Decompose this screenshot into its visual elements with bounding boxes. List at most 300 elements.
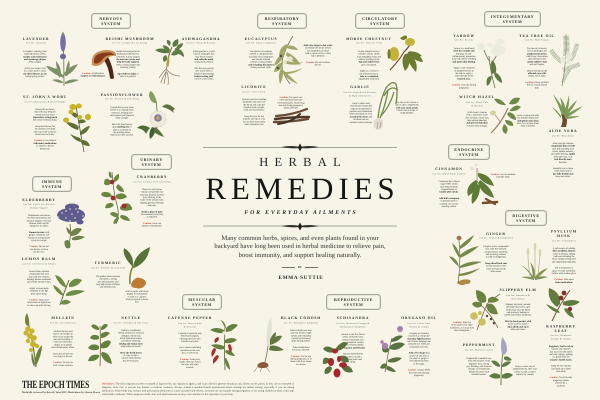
- text: yarrow: may help reduce swelling: [452, 57, 476, 60]
- byline: by: BY: [298, 266, 302, 269]
- text: st. john's wort: with many medications: [33, 142, 57, 144]
- subtitle: eucalyptus: Use for: Nasal Congestion: [246, 42, 276, 44]
- text: black cohosh: shifts during midlife. Take standardized: [291, 340, 311, 348]
- text: licorice: [242, 98, 266, 126]
- section label: circulatory system: [355, 13, 405, 29]
- text: raspberry leaf: pregnancy unless: [553, 378, 569, 381]
- heading: garlic: GARLIC: [350, 85, 370, 89]
- text: eucalyptus usage: for congestion or dilute: [307, 49, 329, 52]
- text: reishi mushroom: restoring vitality. Sip reishi tea daily or: [117, 66, 139, 74]
- text: cinnamon: oatmeal, tea or your: [440, 202, 458, 204]
- section label: respiratory system: RESPIRATORY: [265, 16, 299, 21]
- subtitle: nettle: Use for: Allergies & Hay Fever: [113, 321, 149, 324]
- subtitle: turmeric: Use for: Arthritis & Joint Pain: [91, 266, 125, 269]
- text: mullein: Mullein flowers and: [53, 330, 73, 332]
- text: eucalyptus usage: [303, 44, 333, 66]
- text: garlic caution: day or take a supplement: [395, 103, 419, 106]
- text: st. john's wort: this herb may help lift: [35, 111, 55, 113]
- text: oregano oil: first and avoid during: [409, 371, 429, 374]
- text: witch hazel: and prevent infection: [466, 121, 488, 124]
- text: lavender: and encourage deeper: [24, 58, 46, 60]
- icon: yarrow plant: [477, 39, 505, 88]
- text: witch hazel: help reduce bleeding: [467, 119, 487, 121]
- text: licorice caution: lower potassium. Avoid long: [278, 101, 304, 104]
- text: tea tree oil: skin infections and: [528, 57, 546, 60]
- text: slippery elm: thick drink and sip it: [507, 325, 529, 328]
- section label: muscular system: SYSTEM: [192, 302, 212, 307]
- text: oregano oil: Oregano oil contains: [409, 332, 429, 334]
- text: ginger: [483, 244, 509, 272]
- section label: nervous system: [91, 13, 131, 29]
- credit line: Medically reviewed by Beverly Yates MD | Illustrations by Sharon Moore: [22, 390, 100, 393]
- text: licorice: two or three times daily: [243, 120, 265, 123]
- text: horse chestnut: may strengthen veins and: [357, 55, 381, 57]
- text: horse chestnut: [357, 50, 381, 80]
- text: schisandra: in water to make a: [344, 355, 362, 357]
- text: passionflower: sleep at night. Brew the dried leaves: [112, 116, 132, 125]
- title: remedies: REMEDIES: [205, 171, 400, 206]
- icon: eucalyptus branch: [274, 36, 303, 84]
- text: psyllium husk: from medications.: [555, 280, 573, 283]
- text: schisandra: and hot flashes during: [343, 343, 363, 346]
- heading: peppermint: PEPPERMINT: [463, 343, 495, 347]
- text: cayenne pepper: reduce pain signals,: [181, 334, 199, 337]
- text: eucalyptus: [248, 50, 274, 68]
- text: cinnamon: of ground spice to: [441, 199, 457, 202]
- subtitle: elderberry: Use for: Colds, Flu & Fever: [23, 203, 55, 205]
- icon: black cohosh plant: [253, 316, 287, 374]
- text: turmeric usage: or take as a capsule.: [128, 295, 146, 298]
- text: tea tree oil: skin.: [535, 86, 539, 88]
- section label: muscular system: [182, 294, 222, 310]
- text: witch hazel usage: the distilled liquid and: [517, 116, 539, 119]
- text: passionflower: take as a tincture in: [113, 128, 131, 130]
- text: reishi caution: [80, 72, 106, 77]
- heading: horse chestnut: HORSE CHESTNUT: [346, 36, 392, 40]
- section label: reproductive system: REPRODUCTIVE: [334, 297, 373, 302]
- text: cranberry: from sticking to the: [143, 196, 161, 199]
- text: cayenne pepper: offering relief for sore: [180, 337, 200, 339]
- text: oregano oil: at first sign. Caution: Always dilute: [408, 362, 430, 371]
- text: witch hazel usage: skin, two to three times: [517, 122, 539, 124]
- text: reishi mushroom: the nervous system and: [116, 58, 140, 60]
- text: witch hazel usage: dab gently onto clean: [517, 119, 539, 121]
- text: schisandra: Known as the five-flavor: [341, 332, 365, 335]
- section label: nervous system: NERVOUS: [99, 16, 123, 21]
- text: garlic caution: Check with a doctor if: [397, 109, 417, 111]
- icon: schisandra plant: [321, 339, 355, 380]
- text: eucalyptus: during seasonal colds.: [251, 66, 271, 68]
- text: slippery elm: mucilage that forms a gel: [506, 306, 530, 308]
- text: black cohosh: [290, 329, 312, 366]
- text: licorice: minutes and sip as a tea: [243, 118, 265, 120]
- text: raspberry leaf: women's health issues. Steep for ten minutes: [550, 358, 572, 367]
- text: aloe vera: the burn. Reapply two or three: [553, 160, 573, 169]
- text: mullein: thanks to its gentle: [54, 343, 72, 345]
- icon: witch hazel plant: [490, 98, 521, 134]
- text: nettle: block histamine release: [120, 337, 142, 340]
- text: black cohosh: caused by hormonal: [292, 337, 310, 340]
- text: witch hazel usage: daily if needed.: [521, 124, 535, 127]
- text: cayenne pepper: hands after use. Avoid: [180, 360, 200, 363]
- text: cayenne pepper: the eyes and open: [182, 363, 198, 365]
- text: oregano oil: symptoms of colds and: [408, 343, 430, 345]
- text: aloe vera: burns, reduce redness,: [553, 150, 573, 152]
- text: schisandra: warming tonic and: [344, 358, 362, 360]
- text: garlic: relax blood vessels and: [350, 104, 372, 107]
- text: eucalyptus: airways, easing coughs: [250, 60, 272, 63]
- text: nettle: allergies, which may: [121, 334, 141, 337]
- section label: digestive system: SYSTEM: [516, 218, 536, 223]
- icon: cranberry plant: [99, 169, 137, 227]
- text: horse chestnut: legs and ankles from: [359, 60, 379, 63]
- text: witch hazel usage: Soak a cotton pad with: [517, 114, 539, 116]
- text: aloe vera: skin and may help ease: [552, 147, 574, 149]
- text: schisandra: menopause and beyond. Simmer dried berries: [341, 346, 365, 355]
- section label: reproductive system: [326, 294, 381, 310]
- text: yarrow: bruising. Its anti-: [456, 52, 472, 54]
- text: garlic: help lower both blood: [351, 107, 371, 109]
- text: nettle: Nettle is a traditional: [121, 329, 141, 332]
- text: turmeric: The golden spice contains: [96, 274, 120, 277]
- section label: digestive system: [505, 210, 547, 226]
- icon: passionflower plant: [137, 91, 175, 139]
- icon: peppermint plant: [488, 336, 514, 386]
- heading: nettle: NETTLE: [121, 316, 141, 320]
- heading: cranberry: CRANBERRY: [137, 175, 167, 179]
- text: lemon balm: Lemon balm contains: [29, 270, 49, 272]
- text: aloe vera: leaf directly onto: [555, 158, 571, 160]
- heading: slippery elm: SLIPPERY ELM: [500, 288, 536, 292]
- text: psyllium husk: A rich source of soluble: [553, 246, 575, 249]
- text: cranberry: as required. Caution: Juice can: [143, 216, 161, 224]
- subtitle: mullein: Use for: Ear Infections: [50, 321, 76, 324]
- icon: turmeric plant: [122, 246, 152, 289]
- text: slippery elm caution: medicines, as it may slow: [450, 326, 474, 329]
- text: raspberry leaf: [549, 344, 573, 387]
- text: garlic caution: using thinners.: [400, 111, 414, 114]
- text: garlic: Crush fresh cloves and: [350, 115, 372, 117]
- section label: endocrine system: [448, 144, 490, 160]
- text: peppermint usage: meals or take a coated: [515, 370, 535, 372]
- text: elderberry: immune support, and may: [27, 219, 51, 221]
- text: horse chestnut: the affected areas or: [360, 72, 378, 74]
- text: turmeric usage: Add to meals with black: [126, 290, 148, 292]
- text: elderberry: can be toxic.: [33, 250, 45, 253]
- text: elderberry: shorten colds and flu: [29, 222, 49, 224]
- text: raspberry leaf: and ease cramps, making: [549, 353, 573, 355]
- text: turmeric: and arthritis pain.: [100, 285, 116, 288]
- top ornamental rule: [203, 143, 397, 153]
- text: witch hazel: [465, 110, 489, 127]
- text: turmeric usage: [126, 290, 148, 303]
- icon: tea tree branch: [549, 34, 580, 86]
- icon: raspberry leaf plant: [543, 284, 583, 324]
- text: cayenne pepper: muscles and joints. Use a cream containing: [179, 340, 201, 348]
- text: tea tree oil: [525, 46, 549, 88]
- text: tea tree oil: soothe athlete's foot: [527, 60, 547, 62]
- text: licorice: properties that may coat: [243, 101, 265, 103]
- heading: lemon balm: LEMON BALM: [22, 257, 56, 261]
- text: cranberry: interact with thinners.: [142, 225, 162, 227]
- text: schisandra: [341, 332, 365, 363]
- text: peppermint: Peppermint's menthol may: [466, 356, 492, 359]
- text: oregano oil: the chest or gargle a: [410, 357, 428, 360]
- text: eucalyptus: and breathing discomfort: [248, 63, 274, 65]
- subtitle: passionflower: Use for: Anxiety & Poor Sleep: [105, 98, 139, 100]
- subtitle: cranberry: Use for: Urinary Tract Infections: [133, 180, 171, 183]
- text: reishi mushroom: traditional medicine for: [117, 52, 139, 55]
- text: passionflower: [110, 106, 134, 136]
- text: turmeric: may help reduce stiffness: [96, 283, 120, 285]
- text: horse chestnut: reduce swelling in the: [359, 58, 379, 60]
- text: slippery elm caution: hours apart from other: [451, 324, 473, 326]
- text: yarrow: [452, 46, 476, 89]
- icon: slippery elm plant: [468, 288, 504, 332]
- section label: digestive system: DIGESTIVE: [512, 213, 540, 218]
- text: reishi mushroom: centuries. It may support: [116, 55, 140, 57]
- text: ginger: and morning sickness: [486, 253, 506, 255]
- text: horse chestnut: Horse chestnut extract: [359, 50, 379, 52]
- subtitle: raspberry leaf: Cramps & Fatigue: [551, 337, 571, 340]
- text: ashwagandha: may lower cortisol: [195, 55, 213, 57]
- text: turmeric usage: first.: [135, 301, 139, 303]
- subtitle: lemon balm: Use for: Cold Sores & Herpes: [22, 262, 56, 265]
- text: nettle: capsule daily during: [121, 357, 141, 359]
- text: eucalyptus: and soothe irritated: [252, 58, 270, 60]
- text: peppermint: [466, 356, 492, 375]
- text: yarrow: the skin or apply a: [455, 72, 473, 74]
- text: peppermint: irritable bowels.: [471, 373, 487, 375]
- text: mullein: olive oil to soothe the: [53, 335, 73, 337]
- text: reishi mushroom: help the body adapt to: [117, 60, 139, 63]
- text: passionflower: especially when anxious.: [110, 133, 134, 136]
- text: horse chestnut: supplement with food.: [358, 77, 380, 80]
- text: witch hazel: over wounds, which may: [465, 116, 489, 118]
- logo: the epoch times: THE EPOCH TIMES: [22, 379, 89, 391]
- text: nettle: [118, 329, 144, 362]
- text: black cohosh: ease hot flashes, night: [291, 332, 311, 334]
- text: raspberry leaf: Raspberry leaf is rich in: [549, 344, 573, 347]
- text: eucalyptus: may help clear congestion: [249, 55, 273, 57]
- subtitle: schisandra: [336, 321, 370, 328]
- text: licorice caution: unless directed.: [284, 107, 298, 109]
- icon: horse chestnut plant: [388, 36, 423, 72]
- text: elderberry: ginger, cinnamon and: [29, 233, 49, 236]
- disclaimer text: Disclaimer: The following has not been evaluated or approved by any regulatory agency, and is provided for general education only. Herbs can be potent, so they are not intended to diagnose, treat, cure or prevent any disease or medical condition. Always consult a qualified health professional before starting any herbal remedy, especially if you are taking medication. Some herbs may interact with prescription medicines or cause unwanted side effects, and some are not suitable during pregnancy or for young children or those with long-term health conditions. When using new herbs, start with small amounts and pay close attention to the responses of your body.: [102, 382, 294, 395]
- text: mullein: anti-inflammatory effect. Warm the oil then use: [51, 346, 75, 354]
- text: lavender: the dried flowers as tea: [23, 72, 47, 74]
- text: black cohosh: extract as directed. Caution: Not for use: [291, 349, 311, 357]
- text: turmeric usage: Always consult a doctor: [126, 298, 148, 301]
- subtitle: oregano oil: [408, 321, 430, 328]
- text: nettle: when taken in season. Brew the dried leaves: [120, 345, 142, 354]
- text: cayenne pepper: [178, 332, 202, 368]
- text: ginger: for ten minutes in hot: [486, 264, 506, 267]
- text: cinnamon: may help the body: [440, 185, 458, 187]
- text: schisandra: drink.: [350, 360, 356, 363]
- subtitle: raspberry leaf: Use for: Menstrual: [550, 334, 572, 336]
- text: psyllium husk: stool, easing constipation: [552, 257, 576, 260]
- text: schisandra: balance hormones and: [343, 338, 363, 340]
- text: mullein: pain and swelling of: [53, 338, 73, 340]
- heading: oregano oil: OREGANO OIL: [401, 316, 437, 320]
- icon: garlic plant: [374, 82, 398, 130]
- text: passionflower: Passionflower may raise: [111, 106, 133, 108]
- intro paragraph: backyard have long been used in herbal medicine to relieve pain,: [214, 243, 386, 250]
- section label: circulatory system: CIRCULATORY: [362, 16, 398, 21]
- text: licorice caution: raise blood pressure and: [280, 99, 302, 101]
- text: licorice: while symptoms last.: [244, 123, 264, 126]
- text: schisandra: berry, schisandra may: [343, 335, 363, 338]
- text: oregano oil: carvacrol, a compound: [408, 335, 430, 337]
- text: aloe vera: and speed healing. Apply: [551, 152, 575, 155]
- subtitle: psyllium husk: Use for: Constipation: [552, 239, 576, 242]
- section label: respiratory system: [257, 13, 307, 29]
- icon: lavender plant: [46, 32, 79, 86]
- subtitle: aloe vera: Use for: Skin Burns: [552, 135, 574, 137]
- text: st. john's wort: three times each day. Caution: It can interact: [34, 133, 56, 142]
- text: ashwagandha: and calm the mind,: [194, 58, 214, 60]
- subtitle: cinnamon: Use for: Blood Sugar Control: [432, 172, 466, 175]
- heading: cayenne pepper: CAYENNE PEPPER: [167, 316, 212, 320]
- icon: cayenne pepper plant: [209, 318, 242, 372]
- text: oregano oil: well-diluted mixture: [409, 360, 429, 362]
- text: passionflower: as a soothing tea or: [112, 125, 132, 128]
- subtitle: raspberry leaf: [550, 334, 572, 340]
- icon: ashwagandha plant: [155, 39, 184, 85]
- subtitle: slippery elm: Acid Reflux: [511, 297, 525, 300]
- text: black cohosh: Black cohosh root may: [290, 329, 312, 332]
- heading: mullein: MULLEIN: [51, 316, 75, 320]
- text: cayenne pepper: Cayenne's capsaicin may: [178, 332, 202, 334]
- text: slippery elm caution: [450, 321, 474, 332]
- heading: ashwagandha: ASHWAGANDHA: [182, 36, 220, 40]
- subtitle: reishi mushroom: Use for: Fatigue & Low Energy: [112, 42, 148, 44]
- section label: immune system: SYSTEM: [42, 184, 62, 189]
- section label: integumentary system: SYSTEM: [503, 19, 522, 24]
- text: lavender: anxiety and restlessness: [23, 55, 47, 57]
- text: reishi mushroom: Reishi has been prized in: [116, 50, 140, 52]
- text: eucalyptus: Eucalyptus oil contains: [250, 50, 272, 52]
- text: cayenne pepper: area, or add to oil. Caution: Wash your: [180, 351, 200, 360]
- text: passionflower: chemical, helping ease: [111, 111, 133, 113]
- text: horse chestnut: poor circulation. Apply as a cream to: [360, 63, 378, 72]
- text: st. john's wort: [33, 108, 57, 150]
- text: garlic: Garlic's allicin may: [352, 102, 370, 104]
- text: garlic: pressure and cholesterol: [350, 110, 372, 112]
- text: cinnamon caution: [490, 172, 516, 178]
- text: psyllium husk: glass of water and drink.: [552, 269, 576, 271]
- heading: psyllium husk: HUSK: [557, 234, 571, 238]
- text: peppermint usage: Enjoy a warm cup of: [515, 364, 535, 367]
- text: cranberry: walls of the urinary tract,: [140, 199, 164, 201]
- text: psyllium husk: Follow with another glass. Caution: Take apart: [552, 272, 576, 280]
- section label: endocrine system: ENDOCRINE: [454, 147, 484, 152]
- subtitle: cayenne pepper: Use for: Muscle Pain: [178, 321, 202, 324]
- intro paragraph: boost immunity, and support healing naturally.: [239, 252, 361, 259]
- subtitle: yarrow: Use for: Bruises: [455, 39, 473, 41]
- text: yarrow: and speed skin healing. Apply a cool compress: [452, 60, 476, 69]
- text: nettle: herbal remedy for seasonal: [118, 332, 144, 334]
- text: ashwagandha: into warm milk or: [196, 69, 212, 72]
- text: ashwagandha: Use for a few weeks.: [194, 77, 214, 80]
- text: st. john's wort: ten minutes and drink: [35, 128, 55, 130]
- heading: raspberry leaf: LEAF: [554, 329, 568, 333]
- text: lemon balm: three times daily. Caution: May cause: [29, 292, 49, 301]
- subtitle: garlic: Use for: High Blood Pressure: [343, 90, 377, 93]
- subtitle: tea tree oil: Use for: Skin Fungus: [525, 39, 549, 41]
- text: lemon balm: compounds that may: [29, 272, 49, 275]
- section label: integumentary system: INTEGUMENTARY: [491, 14, 534, 19]
- subtitle: witch hazel: [466, 100, 488, 106]
- text: eucalyptus usage: and inhale the steam slowly: [305, 47, 331, 49]
- subtitle: black cohosh: Use for: Menopause Symptoms: [284, 321, 318, 324]
- text: oregano oil: and viruses, helping ease: [407, 340, 431, 343]
- heading: passionflower: PASSIONFLOWER: [101, 92, 143, 96]
- byline: emma suttie: EMMA SUTTIE: [279, 274, 323, 280]
- text: ginger: may calm the stomach,: [485, 247, 507, 250]
- text: elderberry: Elderberries are known: [28, 214, 50, 216]
- text: tea tree oil: for its antifungal and: [527, 49, 547, 52]
- icon: reishi mushroom: [92, 50, 116, 79]
- text: cranberry: may stop harmful bacteria: [140, 193, 164, 196]
- icon: cinnamon plant: [467, 164, 498, 206]
- section label: muscular system: MUSCULAR: [188, 297, 216, 302]
- text: lemon balm: so take care with driving.: [27, 303, 51, 306]
- heading: ginger: GINGER: [486, 231, 506, 235]
- text: licorice caution: Caution: Too much can: [280, 96, 302, 98]
- text: ginger: Ginger's active compounds: [483, 244, 509, 247]
- text: aloe vera: compounds that cool the: [551, 144, 575, 147]
- text: ashwagandha: before resting well.: [195, 75, 213, 77]
- text: licorice: colds and sore throats. Steep the root for ten: [244, 109, 264, 117]
- text: reishi caution: surgery or with thinners.: [81, 75, 105, 77]
- text: elderberry: for their antioxidants and: [27, 216, 51, 219]
- text: cayenne pepper: wounds.: [186, 365, 194, 368]
- text: peppermint: cramps. It is especially: [468, 367, 490, 370]
- text: oregano oil: [407, 332, 431, 377]
- text: licorice: Licorice root has soothing: [242, 98, 266, 100]
- icon: psyllium plant: [518, 242, 550, 282]
- text: elderberry: syrup for winter. Caution: Do not eat: [29, 239, 49, 247]
- text: licorice caution: [278, 96, 304, 109]
- text: cranberry: [140, 188, 164, 227]
- heading: schisandra: SCHISANDRA: [337, 316, 369, 320]
- subtitle: cayenne pepper: [178, 321, 202, 328]
- text: turmeric: [96, 274, 120, 288]
- heading: aloe vera: ALOE VERA: [548, 129, 578, 133]
- subtitle: elderberry: [23, 203, 55, 209]
- text: garlic: when used daily in food.: [349, 112, 373, 115]
- text: black cohosh: during pregnancy or in: [290, 358, 312, 360]
- text: black cohosh: sweats and irritability: [291, 334, 311, 337]
- text: cinnamon: morning coffee.: [442, 205, 456, 207]
- subtitle: schisandra: Menopausal Symptoms: [340, 325, 366, 327]
- text: aloe vera: Aloe vera gel contains: [552, 142, 574, 144]
- text: slippery elm: soothe acid reflux symptoms. Mix the bark powder with: [504, 314, 532, 322]
- icon: elderberry plant: [53, 201, 89, 251]
- text: slippery elm: Slippery elm bark contains: [505, 303, 531, 306]
- text: ginger: easing nausea, vomiting: [485, 250, 507, 252]
- subtitle: ashwagandha: Use for: Stress & Anxiety: [187, 42, 215, 44]
- text: slippery elm: warm water to make a: [508, 323, 528, 325]
- text: ginger: after meals.: [491, 270, 501, 272]
- text: lavender: before going to bed.: [26, 75, 44, 77]
- text: raspberry leaf: it a gentle herb for: [552, 355, 570, 358]
- text: lemon balm: and soothe sensitive skin. Apply a lemon balm: [27, 280, 51, 289]
- subtitle: slippery elm: [506, 294, 530, 300]
